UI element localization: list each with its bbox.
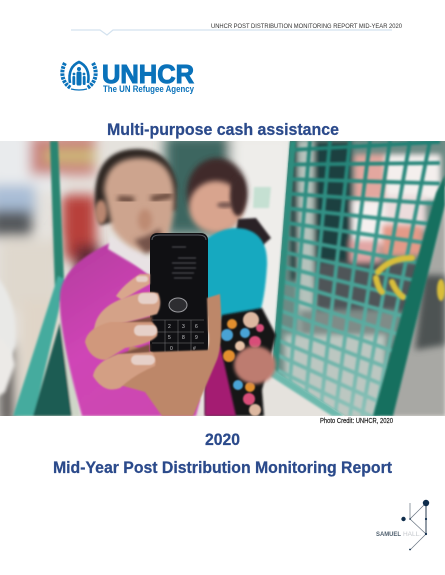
man pink shirt	[60, 243, 200, 416]
bananas	[376, 258, 412, 297]
logo emblem	[62, 62, 96, 90]
logo text: SAMUEL	[376, 531, 401, 538]
report subtitle: Mid-Year Post Distribution Monitoring Report	[53, 458, 392, 477]
phone top rim	[152, 235, 206, 240]
child hair and head	[187, 158, 247, 226]
Samuel Hall logo	[376, 500, 429, 550]
man face	[104, 158, 174, 252]
phone screen text	[172, 247, 196, 278]
thumb tip	[116, 274, 150, 300]
grate post	[373, 175, 445, 416]
year: 2020	[205, 430, 240, 449]
header text: UNHCR POST DISTRIBUTION MONITORING REPORT MID-YEAR 2020	[211, 23, 402, 30]
man brows eyes	[118, 195, 172, 200]
Samuel Hall logo: HALL.	[403, 531, 421, 538]
logo tagline: The UN Refugee Agency	[103, 84, 194, 94]
phone: 3	[182, 324, 185, 330]
wreath	[62, 63, 96, 88]
phone: 0	[170, 346, 173, 352]
green pole and rail	[13, 141, 80, 416]
finger nails	[131, 276, 158, 365]
wall sign	[253, 187, 271, 208]
child hand	[234, 346, 276, 384]
photo: man holding mobile phone with child	[0, 141, 445, 416]
hand	[85, 274, 221, 416]
man collar	[106, 240, 148, 274]
phone: 9	[195, 335, 198, 341]
child teal jacket	[205, 228, 267, 322]
phone	[150, 233, 208, 356]
grate	[273, 141, 445, 416]
ring finger	[93, 352, 156, 390]
child collar	[236, 218, 271, 246]
man	[60, 149, 200, 416]
man mouth and beard	[134, 228, 162, 254]
phone: 2	[168, 324, 171, 330]
header rule with notch	[71, 30, 392, 35]
phone keypad	[152, 320, 204, 352]
middle finger	[85, 322, 157, 360]
grate frame	[270, 141, 345, 416]
logo network	[410, 503, 426, 550]
UNHCR logo	[62, 61, 194, 94]
left blurred car	[0, 281, 17, 357]
phone: 8	[182, 335, 185, 341]
man hair	[95, 149, 177, 225]
man nose shade	[138, 209, 152, 231]
finger gap shadows	[108, 316, 154, 358]
phone: #	[193, 346, 196, 352]
man ear	[95, 200, 107, 224]
palm	[120, 294, 221, 416]
sheltering hands	[69, 62, 89, 83]
logo wordmark: UNHCR	[102, 61, 194, 89]
index finger	[94, 292, 160, 330]
right pavement	[390, 200, 445, 416]
photo credit: Photo Credit: UNHCR, 2020	[320, 416, 393, 425]
street background	[0, 130, 292, 425]
phone: 5	[168, 335, 171, 341]
child spotted pants	[205, 308, 276, 416]
child	[187, 158, 276, 416]
phone: 6	[195, 324, 198, 330]
title: Multi-purpose cash assistance	[107, 120, 339, 139]
